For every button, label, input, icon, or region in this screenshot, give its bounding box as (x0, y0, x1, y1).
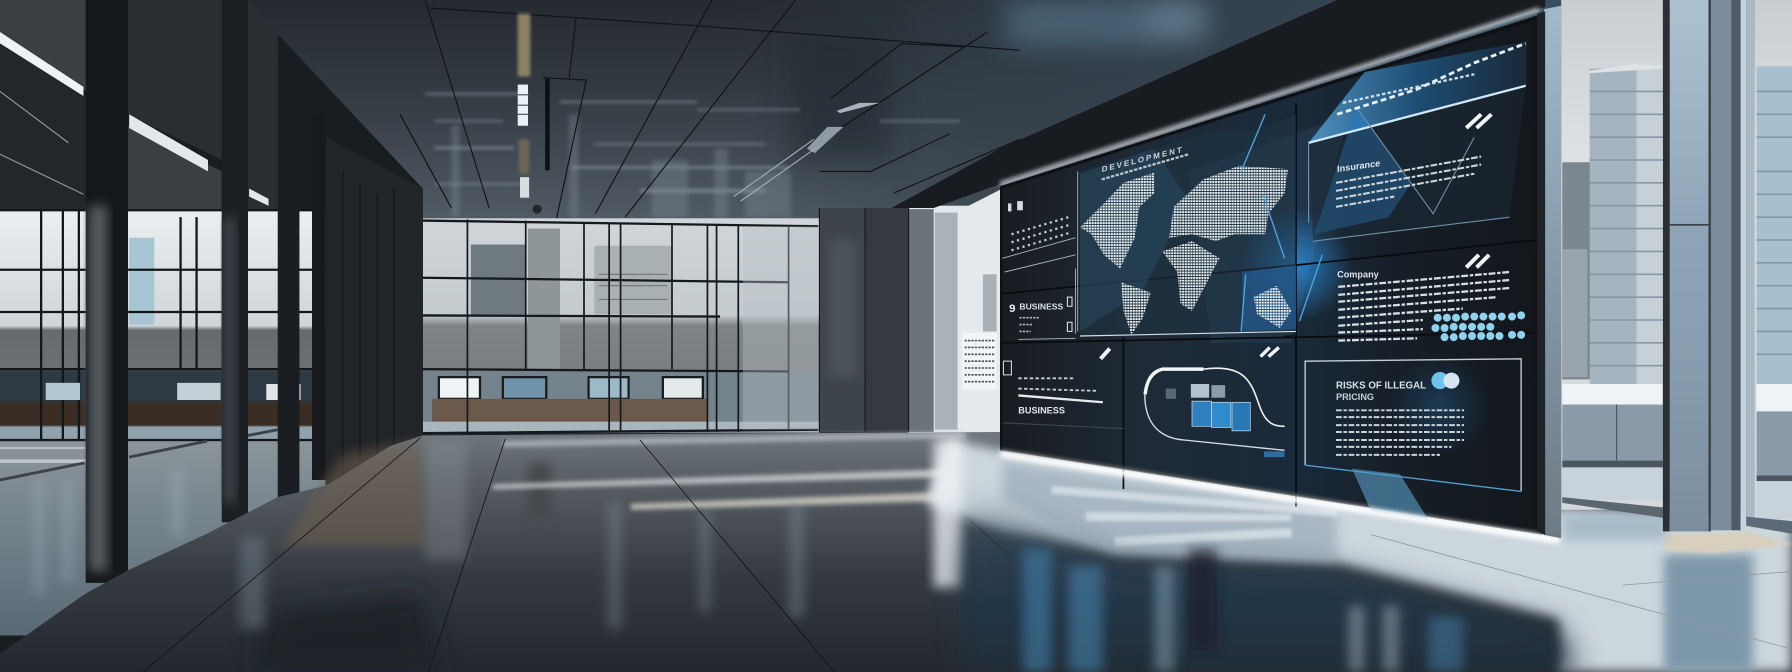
middle right text panel: Company (1337, 270, 1380, 280)
bright floor under wall (926, 439, 1792, 672)
soffit above wall (891, 0, 1545, 208)
glass shards (1189, 114, 1349, 343)
back window wall (423, 218, 819, 433)
white floor streak (934, 439, 962, 587)
lower right framed panel (1305, 359, 1521, 491)
back monitors (439, 377, 703, 399)
seams (1002, 103, 1537, 506)
lower right framed panel: RISKS OF ILLEGAL (1336, 381, 1426, 392)
leaf logo (1101, 349, 1110, 359)
dot chart (1431, 311, 1525, 341)
lower right framed panel: PRICING (1336, 392, 1374, 402)
slash logo (1466, 255, 1489, 267)
lower left panel (1003, 349, 1123, 429)
ceiling (0, 0, 1600, 223)
top right glass panel (1309, 41, 1527, 241)
center vertical reflection (425, 440, 466, 560)
map rules (1080, 331, 1296, 336)
ceiling lights and vent (518, 14, 880, 214)
left vertical reflection (240, 537, 265, 629)
glowing wall base (1000, 454, 1560, 541)
warm reflection (280, 440, 425, 546)
left glass wall (0, 0, 423, 653)
paragraph lines (1336, 157, 1481, 207)
dark foreground pool (251, 594, 440, 672)
panel: infographic video wall (1000, 14, 1543, 535)
right pillar (1663, 0, 1670, 531)
map panel (1080, 114, 1322, 336)
floor (0, 432, 1792, 672)
ceiling reflections (425, 93, 960, 193)
back counter (432, 399, 707, 422)
pole reflection (528, 463, 551, 520)
left column widgets: 9 (1009, 303, 1015, 315)
dark column and door opening (819, 190, 1000, 451)
dark blue reflection (962, 509, 1577, 672)
pillar reflection on right floor (1664, 554, 1753, 672)
lower left panel: BUSINESS (1018, 406, 1065, 416)
slash logo (1466, 114, 1491, 128)
far right window (1754, 0, 1792, 521)
map title: DEVELOPMENT (1102, 145, 1182, 174)
vertical floor streaks (608, 503, 805, 629)
ceiling strip reflections (0, 32, 269, 206)
blue thumbnails (1166, 384, 1250, 431)
world map (1080, 166, 1291, 335)
dark pillars (86, 0, 423, 583)
window reflection in glass (0, 210, 326, 441)
window light stripes (493, 432, 966, 510)
glow line above wall (1000, 9, 1539, 184)
left column widgets: BUSINESS (1019, 302, 1063, 312)
left column widgets (1002, 171, 1078, 339)
right window with city (1537, 0, 1792, 538)
middle right text panel (1337, 255, 1525, 341)
top right glass panel: Insurance (1337, 158, 1380, 174)
lower middle curved panel (1145, 347, 1285, 457)
slash logo (1261, 347, 1279, 357)
frame strip at wall right (1544, 6, 1561, 538)
